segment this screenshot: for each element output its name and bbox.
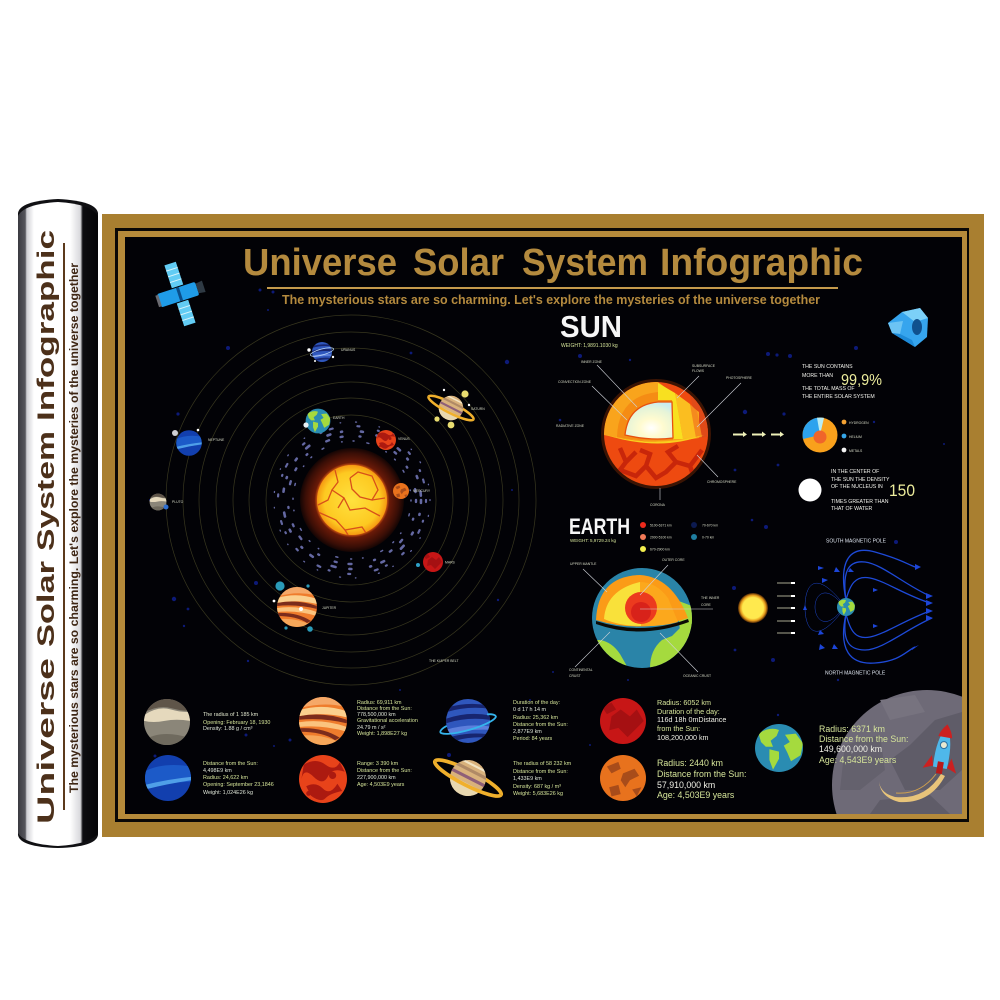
- background stars: [149, 288, 945, 758]
- field lines: [805, 550, 932, 663]
- subtitle: The mysterious stars are so charming. Let's explore the mysteries of the universe together: [282, 292, 820, 307]
- fact: Saturn: [426, 745, 572, 812]
- fact: Uranus: Distance from the Sun:: [513, 722, 568, 728]
- fact: Uranus: [439, 699, 568, 743]
- planet: Mars: [416, 552, 456, 572]
- sun weight: WEIGHT: 1,9891.1030 kg: [561, 343, 618, 349]
- planet: Earth: EARTH: [333, 416, 345, 420]
- orbit rings: [166, 315, 536, 685]
- fact: Pluto: Opening: February 18, 1930: [203, 720, 270, 726]
- pie legend: HELIUM: [849, 435, 862, 439]
- solar system diagram: [150, 315, 536, 685]
- sun cross-section: [601, 379, 712, 489]
- earth legend: 670-2900 km: [650, 548, 670, 552]
- fact: Pluto: [144, 699, 270, 747]
- fact: Uranus: Duration of the day:: [513, 700, 560, 706]
- fact: Jupiter: [299, 697, 418, 747]
- density text: THE SUN THE DENSITY: [831, 477, 890, 483]
- sun labels: INNER ZONE: [581, 360, 603, 364]
- mass text: MORE THAN: [802, 373, 833, 379]
- icon: white nucleus circle: [798, 478, 822, 502]
- title: Universe: [243, 242, 397, 284]
- title: System: [522, 242, 648, 284]
- tube subtitle: The mysterious stars are so charming. Let's explore the mysteries of the universe together: [67, 263, 81, 793]
- planet: Mercury: MERCURY: [413, 489, 431, 493]
- fact: Uranus: 0 d 17 h 14 m: [513, 707, 546, 713]
- sun labels: CHROMOSPHERE: [707, 480, 737, 484]
- fact: Neptune: 4,498E9 km: [203, 768, 232, 774]
- fact: Jupiter: Gravitational acceleration: [357, 718, 418, 724]
- earth legend: 0-70 km: [702, 536, 714, 540]
- sun labels: SUBSURFACE: [692, 364, 716, 368]
- solar wind arrows: [777, 582, 795, 634]
- fact: Mercury: 57,910,000 km: [657, 780, 715, 790]
- fact: Neptune: Distance from the Sun:: [203, 761, 258, 767]
- density text: THAT OF WATER: [831, 506, 873, 512]
- fact: Neptune: Opening: September 23,1846: [203, 782, 274, 788]
- earth cross-section: [592, 568, 692, 668]
- fact: Jupiter: 778,500,000 km: [357, 712, 396, 718]
- earth labels: UPPER MANTLE: [570, 562, 597, 566]
- fact: Mercury: [600, 755, 746, 801]
- title: [243, 242, 863, 284]
- mass text: 99,9%: [841, 372, 882, 389]
- fact: Venus: 116d 18h 0mDistance: [657, 715, 726, 724]
- planet: Mars: MARS: [445, 560, 456, 564]
- density text: 150: [889, 481, 915, 500]
- tube title: Solar: [33, 560, 60, 647]
- heading: EARTH: EARTH: [569, 514, 630, 539]
- fact: Mars: 227,900,000 km: [357, 775, 396, 781]
- pole labels: [825, 538, 887, 676]
- planet: Neptune: NEPTUNE: [208, 438, 225, 442]
- planet: Venus: [376, 430, 410, 450]
- fact: Uranus: Radius: 25,362 km: [513, 715, 558, 721]
- fact: Neptune: Radius: 24,622 km: [203, 775, 248, 781]
- heading: SUN: SUN: [560, 309, 622, 344]
- fact: Neptune: Weight: 1,024E26 kg: [203, 790, 253, 796]
- earth legend: 5100-6371 km: [650, 524, 672, 528]
- fact: Mercury: Radius: 2440 km: [657, 758, 723, 768]
- icon: crystal capsule: [888, 308, 928, 347]
- planet: Venus: VENUS: [398, 437, 410, 441]
- planet: Uranus: [307, 342, 356, 362]
- fact: Earth: Distance from the Sun:: [819, 734, 908, 744]
- small sun: [738, 593, 768, 623]
- mass text: [802, 364, 882, 400]
- mass text: THE ENTIRE SOLAR SYSTEM: [802, 394, 875, 400]
- fact: Venus: 108,200,000 km: [657, 733, 709, 742]
- fact: Saturn: Density: 687 kg / m³: [513, 784, 561, 790]
- poster frame: [102, 214, 984, 837]
- title: Solar: [413, 242, 504, 284]
- planet: Jupiter: JUPITER: [322, 606, 337, 610]
- density text: TIMES GREATER THAN: [831, 499, 889, 505]
- asteroid belt: [274, 422, 430, 578]
- pie legend: HYDROGEN: [849, 421, 869, 425]
- earth labels: CORE: [701, 603, 712, 607]
- rolled poster tube: [18, 199, 98, 848]
- pole labels: NORTH MAGNETIC POLE: [825, 670, 886, 676]
- mass text: THE TOTAL MASS OF: [802, 386, 855, 392]
- fact: Jupiter: 24.79 m / s²: [357, 725, 386, 731]
- fact: Saturn: Weight: 5,683E26 kg: [513, 791, 563, 797]
- earth legend: [640, 522, 718, 552]
- fact: Mercury: Age: 4,503E9 years: [657, 790, 735, 800]
- earth legend: 2900-5100 km: [650, 536, 672, 540]
- fact: Mercury: Distance from the Sun:: [657, 769, 746, 779]
- rocket: [879, 721, 964, 802]
- small earth: [837, 598, 855, 616]
- sun labels: PHOTOSPHERE: [726, 376, 753, 380]
- title: Infographic: [660, 242, 863, 284]
- fact: Mars: Range: 3 390 km: [357, 761, 399, 767]
- sun labels: CORONA: [650, 503, 666, 507]
- mass text: THE SUN CONTAINS: [802, 364, 853, 370]
- planet: Jupiter: [273, 581, 337, 632]
- earth labels: OCEANIC CRUST: [683, 674, 711, 678]
- density text: [831, 469, 915, 512]
- fact: Saturn: The radius of 58 232 km: [513, 761, 572, 767]
- icon: satellite: [147, 256, 214, 332]
- sun labels: RADIATIVE ZONE: [556, 424, 585, 428]
- tube title: Infographic: [33, 230, 60, 421]
- planet fact row: [144, 697, 908, 812]
- pie legend: METALS: [849, 449, 863, 453]
- fact: Mars: [299, 755, 412, 803]
- pole labels: SOUTH MAGNETIC POLE: [826, 538, 887, 544]
- callout lines: [592, 365, 741, 500]
- earth labels: THE INNER: [701, 596, 720, 600]
- earth legend: 70-670 km: [702, 524, 718, 528]
- callout lines: [575, 565, 713, 672]
- tube title: [33, 230, 60, 824]
- fact: Earth: [755, 724, 908, 772]
- field arrowheads: [803, 564, 933, 650]
- density text: OF THE NUCLEUS IN: [831, 484, 883, 490]
- label: Kuiper belt: THE KUIPER BELT: [429, 659, 459, 663]
- panel: magnetic field: [777, 538, 933, 676]
- fact: Mars: Distance from the Sun:: [357, 768, 412, 774]
- pie legend: [842, 420, 869, 453]
- panel: earth: [569, 514, 768, 680]
- fact: Earth: Radius: 6371 km: [819, 724, 885, 734]
- fact: Earth: Age: 4,543E9 years: [819, 755, 897, 765]
- planet: Pluto: PLUTO: [172, 500, 184, 504]
- planet: Saturn: [423, 386, 485, 431]
- sun labels: CONVECTION ZONE: [558, 380, 592, 384]
- fact: Saturn: Distance from the Sun:: [513, 769, 568, 775]
- arrows: [733, 432, 784, 437]
- earth weight: WEIGHT: 5,9729.24 kg: [570, 538, 617, 543]
- tube title: Universe: [33, 658, 60, 824]
- fact: Uranus: Period: 84 years: [513, 736, 553, 742]
- earth labels: OUTER CORE: [662, 558, 685, 562]
- fact: Jupiter: Distance from the Sun:: [357, 706, 412, 712]
- fact: Uranus: 2,877E9 km: [513, 729, 542, 735]
- moon: [832, 690, 962, 814]
- panel: sun: [556, 309, 915, 512]
- fact: Venus: [600, 698, 726, 744]
- planet: Saturn: SATURN: [471, 407, 485, 411]
- planet: Earth: [303, 409, 345, 433]
- fact: Venus: from the Sun:: [657, 724, 700, 733]
- earth labels: CONTINENTAL: [569, 668, 593, 672]
- planet: Uranus: URANUS: [341, 348, 356, 352]
- fact: Pluto: Density: 1.88 g / cm³: [203, 726, 253, 732]
- earth labels: CRUST: [569, 674, 581, 678]
- sun labels: FLOWS: [692, 369, 705, 373]
- density text: IN THE CENTER OF: [831, 469, 879, 475]
- fact: Mars: Age: 4,503E9 years: [357, 782, 405, 788]
- fact: Pluto: The radius of 1 185 km: [203, 712, 259, 718]
- planet: Mercury: [393, 483, 431, 499]
- fact: Neptune: [145, 755, 274, 801]
- pie chart: [802, 417, 838, 452]
- fact: Venus: Duration of the day:: [657, 707, 720, 716]
- tube title: System: [33, 431, 60, 551]
- planet: Neptune: [172, 429, 225, 456]
- earth labels: [569, 558, 720, 678]
- fact: Saturn: 1,433E9 km: [513, 776, 542, 782]
- fact: Venus: Radius: 6052 km: [657, 698, 711, 707]
- fact: Jupiter: Weight: 1,898E27 kg: [357, 731, 407, 737]
- fact: Earth: 149,600,000 km: [819, 744, 882, 754]
- panel: moon and rocket: [832, 690, 962, 814]
- sun: [300, 448, 404, 552]
- planet: Pluto: [150, 494, 184, 511]
- sun labels: [556, 360, 753, 507]
- fact: Jupiter: Radius: 69,911 km: [357, 700, 402, 706]
